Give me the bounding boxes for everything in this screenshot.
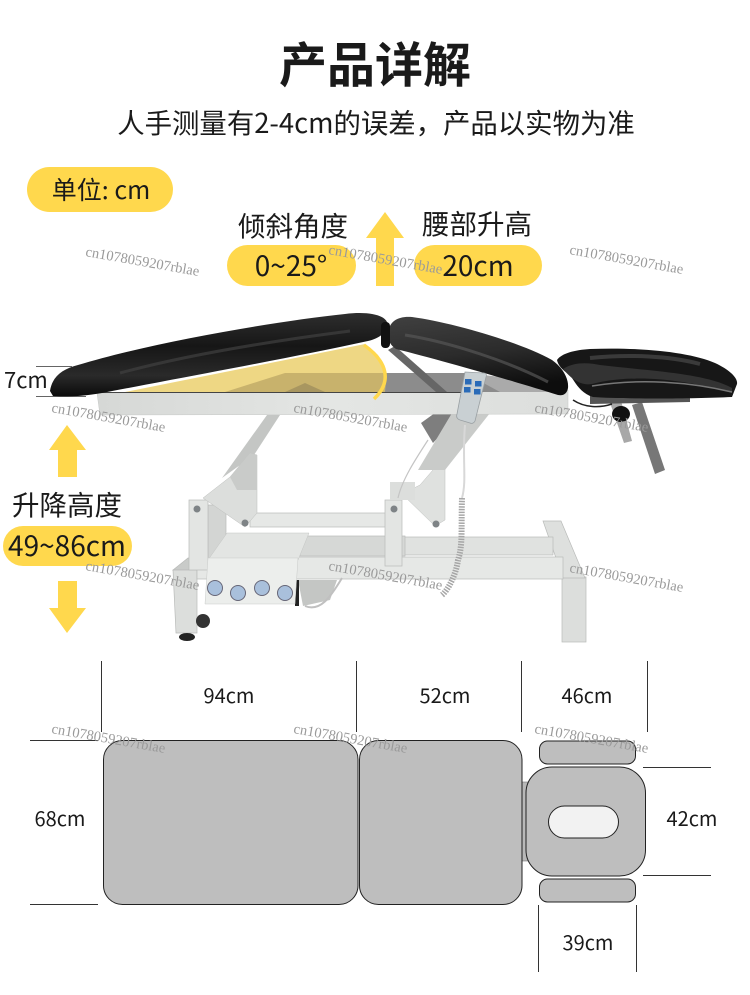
table deck bbox=[97, 373, 568, 415]
watermarks: cn1078059207rblae bbox=[292, 721, 409, 757]
arrow: height up bbox=[49, 425, 86, 477]
arrow: waist raise bbox=[366, 212, 404, 286]
pad: head top bbox=[540, 741, 636, 764]
arrow: height down bbox=[49, 581, 86, 633]
cushion: body highlight bbox=[120, 331, 350, 373]
dimension labels: 42cm bbox=[667, 803, 717, 832]
dimension labels: 39cm bbox=[563, 927, 613, 956]
label: waist raise: 腰部升高 bbox=[422, 202, 532, 242]
cushion: body bbox=[50, 313, 387, 397]
watermarks bbox=[50, 242, 685, 757]
title: 产品详解 bbox=[279, 26, 471, 96]
dimension labels: 52cm bbox=[420, 680, 470, 709]
watermarks: cn1078059207rblae bbox=[327, 242, 444, 278]
subtitle: 人手测量有2-4cm的误差，产品以实物为准 bbox=[117, 101, 635, 141]
watermarks: cn1078059207rblae bbox=[327, 558, 444, 594]
cushion hinge bbox=[381, 322, 390, 348]
dimension labels: 46cm bbox=[562, 680, 612, 709]
headrest bracket bbox=[573, 396, 690, 474]
label: tilt angle bbox=[227, 204, 356, 286]
lift arms bbox=[203, 405, 490, 527]
remote control bbox=[457, 372, 486, 423]
tilt angle wedge bbox=[125, 344, 386, 399]
cushion: waist highlight bbox=[405, 335, 548, 382]
badge: unit bbox=[27, 167, 173, 212]
dimension labels: 94cm bbox=[204, 680, 254, 709]
watermarks: cn1078059207rblae bbox=[84, 244, 201, 280]
pad: head bbox=[526, 767, 646, 876]
pad: waist bbox=[360, 740, 522, 904]
watermarks: cn1078059207rblae bbox=[50, 721, 167, 757]
cushion: waist bbox=[388, 317, 568, 395]
label: tilt angle: 倾斜角度 bbox=[238, 204, 348, 244]
coiled cord bbox=[442, 498, 462, 595]
label: tilt angle: 0~25° bbox=[255, 245, 327, 285]
thin wire bbox=[398, 440, 428, 498]
watermarks: cn1078059207rblae bbox=[533, 721, 650, 757]
table illustration bbox=[50, 313, 737, 642]
dimension lines bbox=[30, 661, 711, 972]
cord bbox=[462, 425, 465, 498]
dimension: cushion thickness: 7cm bbox=[4, 363, 48, 395]
badge: lift height: 49~86cm bbox=[8, 525, 126, 565]
headrest connector bbox=[522, 782, 528, 861]
control panel plate bbox=[205, 533, 309, 604]
label: waist raise bbox=[414, 202, 542, 286]
label: waist raise: 20cm bbox=[442, 245, 514, 285]
motor bbox=[295, 578, 342, 607]
dimension: cushion thickness bbox=[4, 363, 86, 396]
watermarks: cn1078059207rblae bbox=[292, 400, 409, 436]
pad: head bottom bbox=[540, 879, 636, 902]
dimension labels bbox=[35, 680, 717, 956]
badge: unit: 单位: cm bbox=[52, 171, 150, 207]
bolts bbox=[194, 506, 440, 528]
label: lift height: 升降高度 bbox=[12, 483, 122, 523]
dimension labels: 68cm bbox=[35, 803, 85, 832]
base frame bbox=[173, 500, 586, 642]
watermarks: cn1078059207rblae bbox=[84, 558, 201, 594]
watermarks: cn1078059207rblae bbox=[533, 400, 650, 436]
watermarks: cn1078059207rblae bbox=[50, 400, 167, 436]
waist actuator bbox=[388, 346, 447, 392]
cushion: headrest bbox=[557, 349, 737, 398]
top view diagram bbox=[30, 661, 717, 972]
face hole bbox=[548, 806, 618, 838]
casters bbox=[179, 614, 210, 641]
pad: body bbox=[104, 740, 358, 904]
watermarks: cn1078059207rblae bbox=[568, 560, 685, 596]
watermarks: cn1078059207rblae bbox=[568, 242, 685, 278]
